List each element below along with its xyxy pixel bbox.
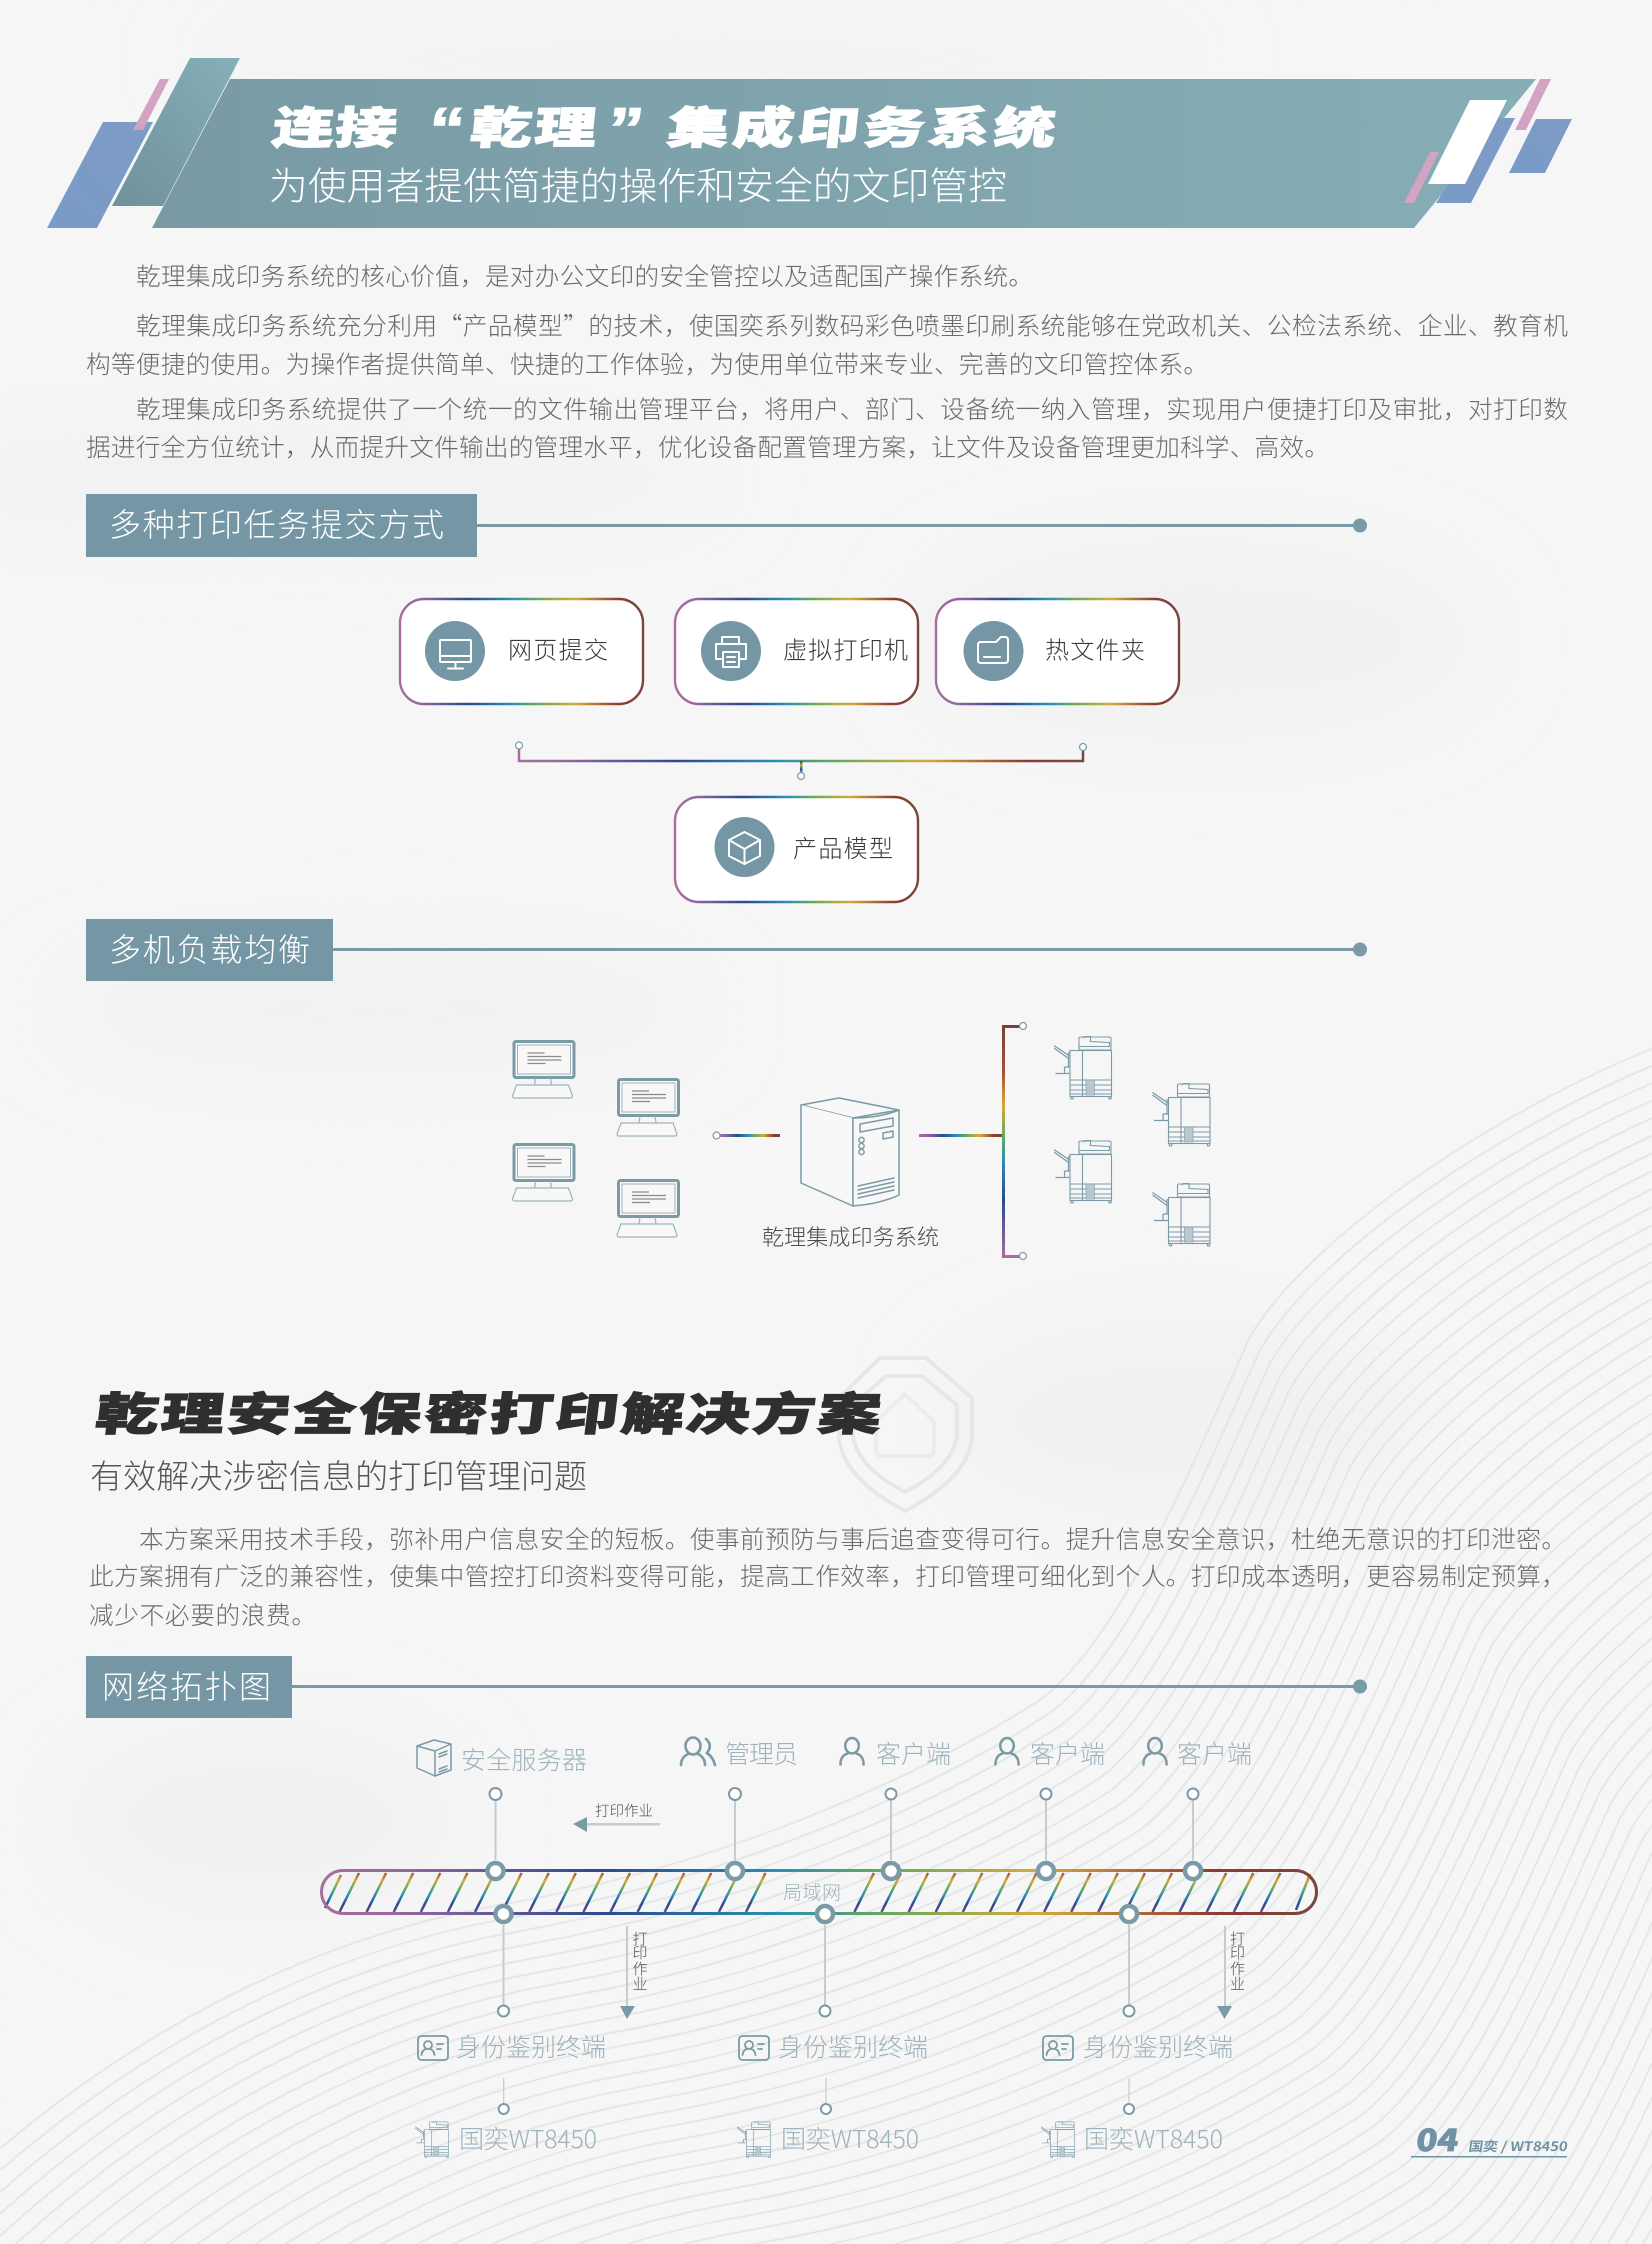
icon: cube bbox=[729, 832, 760, 864]
watermark shield bbox=[839, 1358, 972, 1511]
banner subtitle: 为使用者提供简捷的操作和安全的文印管控 bbox=[269, 156, 1007, 210]
printers WT8450: 国奕WT8450 bbox=[1084, 2120, 1223, 2156]
arrow: print job down 2 bbox=[1217, 1926, 1245, 2019]
icon: server bbox=[801, 1098, 899, 1206]
intro paragraphs: 乾理集成印务系统提供了一个统一的文件输出管理平台，将用户、部门、设备统一纳入管理，实现用户便捷打印及审批，对打印数 bbox=[136, 390, 1568, 426]
top node labels: 管理员 bbox=[725, 1735, 798, 1771]
solution subheading: 有效解决涉密信息的打印管理问题 bbox=[90, 1450, 587, 1498]
load balancing diagram bbox=[512, 1022, 1210, 1260]
network topology diagram bbox=[322, 1735, 1316, 2158]
intro paragraphs bbox=[86, 257, 1568, 464]
tube nodes bbox=[488, 1863, 1201, 1922]
section heading: 网络拓扑图: 网络拓扑图 bbox=[102, 1662, 271, 1708]
icon: folder bbox=[978, 637, 1008, 663]
section heading: 多机负载均衡: 多机负载均衡 bbox=[109, 925, 310, 971]
local network tube bbox=[322, 1870, 1316, 1914]
card: 网页提交 bbox=[400, 599, 643, 704]
card: 热文件夹 bbox=[936, 599, 1179, 704]
icon: client 1 bbox=[840, 1738, 864, 1764]
banner title: 乾理 bbox=[468, 93, 600, 157]
banner title: 集成印务系统 bbox=[665, 93, 1059, 157]
footer page mark: 国奕 / WT8450 bbox=[1467, 2136, 1569, 2155]
arrow: print job down 1: 打 bbox=[632, 1928, 648, 1949]
arrow: print job down 2: 业 bbox=[1230, 1973, 1245, 1994]
icon: printers bbox=[1054, 1036, 1210, 1246]
arrow: print job down 2: 作 bbox=[1230, 1958, 1245, 1979]
arrow: print job to server: 打印作业 bbox=[595, 1800, 653, 1821]
top node labels: 客户端 bbox=[1030, 1735, 1105, 1771]
solution paragraph: 减少不必要的浪费。 bbox=[89, 1596, 316, 1632]
banner title bbox=[270, 93, 1059, 162]
arrow: print job to server bbox=[573, 1800, 660, 1832]
solution paragraph: 本方案采用技术手段，弥补用户信息安全的短板。使事前预防与事后追查变得可行。提升信息安全意识，杜绝无意识的打印泄密。 bbox=[139, 1520, 1566, 1556]
icon: security server bbox=[417, 1740, 451, 1776]
server label: 乾理集成印务系统 bbox=[762, 1220, 939, 1252]
card: 产品模型: 产品模型 bbox=[793, 829, 893, 864]
intro paragraphs: 乾理集成印务系统的核心价值，是对办公文印的安全管控以及适配国产操作系统。 bbox=[136, 257, 1033, 293]
section heading: 多种打印任务提交方式 bbox=[86, 494, 1367, 557]
title banner bbox=[152, 79, 1536, 228]
arrow: print job down 1: 业 bbox=[632, 1973, 648, 1994]
section heading: 多机负载均衡 bbox=[86, 919, 1367, 981]
solution paragraph bbox=[89, 1520, 1566, 1632]
identity terminals: 身份鉴别终端 bbox=[456, 2028, 606, 2064]
identity terminals bbox=[418, 2028, 1233, 2064]
local network tube: 局域网 bbox=[783, 1878, 841, 1905]
top node labels bbox=[417, 1735, 1252, 1777]
arrow: print job down 2: 打 bbox=[1230, 1928, 1245, 1949]
connector stems bbox=[496, 1800, 1193, 2005]
banner left accent strips bbox=[47, 58, 240, 228]
icon: client 3 bbox=[1143, 1738, 1167, 1764]
top node labels: 客户端 bbox=[1177, 1735, 1252, 1771]
intro paragraphs: 构等便捷的使用。为操作者提供简单、快捷的工作体验，为使用单位带来专业、完善的文印管控体系。 bbox=[86, 345, 1208, 381]
solution heading: 乾理安全保密打印解决方案 bbox=[92, 1378, 886, 1443]
arrow: print job down 1: 作 bbox=[632, 1958, 648, 1979]
printers WT8450 bbox=[415, 2120, 1223, 2158]
top node labels: 客户端 bbox=[876, 1735, 951, 1771]
banner title: ” bbox=[604, 96, 647, 162]
footer page mark: 04 bbox=[1414, 2116, 1462, 2160]
arrow: print job down 1: 印 bbox=[632, 1942, 648, 1963]
icon: client 2 bbox=[995, 1738, 1019, 1764]
printers WT8450: 国奕WT8450 bbox=[781, 2120, 919, 2156]
card: 虚拟打印机 bbox=[675, 599, 918, 704]
connector: clients to server bbox=[713, 1132, 780, 1139]
icon: admin bbox=[681, 1738, 715, 1765]
connector between cards bbox=[516, 742, 1086, 780]
card: 网页提交: 网页提交 bbox=[508, 630, 608, 666]
footer page mark bbox=[1411, 2116, 1569, 2160]
banner title: 连接 bbox=[270, 93, 401, 157]
icon: client computers bbox=[512, 1042, 678, 1237]
card: 虚拟打印机: 虚拟打印机 bbox=[783, 630, 908, 666]
arrow: print job down 1 bbox=[620, 1926, 648, 2019]
section heading: 网络拓扑图 bbox=[86, 1656, 1367, 1718]
top node labels: 安全服务器 bbox=[461, 1741, 587, 1777]
identity terminals: 身份鉴别终端 bbox=[778, 2028, 928, 2064]
banner right accent strips bbox=[1404, 79, 1572, 203]
banner title: “ bbox=[425, 96, 468, 162]
icon: printer bbox=[716, 637, 746, 667]
section heading: 多种打印任务提交方式: 多种打印任务提交方式 bbox=[109, 500, 444, 546]
icon: monitor bbox=[440, 640, 471, 668]
arrow: print job down 2: 印 bbox=[1230, 1942, 1245, 1963]
card: 产品模型 bbox=[675, 797, 918, 902]
printers WT8450: 国奕WT8450 bbox=[459, 2120, 597, 2156]
solution paragraph: 此方案拥有广泛的兼容性，使集中管控打印资料变得可能，提高工作效率，打印管理可细化到个人。打印成本透明，更容易制定预算， bbox=[89, 1557, 1566, 1593]
connector: server to printers bbox=[919, 1022, 1026, 1260]
pins bbox=[490, 1788, 1198, 2016]
identity terminals: 身份鉴别终端 bbox=[1083, 2028, 1233, 2064]
terminal to printer pins bbox=[499, 2078, 1134, 2114]
intro paragraphs: 据进行全方位统计，从而提升文件输出的管理水平，优化设备配置管理方案，让文件及设备管理更加科学、高效。 bbox=[86, 428, 1329, 464]
card: 热文件夹: 热文件夹 bbox=[1045, 630, 1145, 666]
intro paragraphs: 乾理集成印务系统充分利用“产品模型”的技术，使国奕系列数码彩色喷墨印刷系统能够在党政机关、公检法系统、企业、教育机 bbox=[136, 306, 1568, 342]
